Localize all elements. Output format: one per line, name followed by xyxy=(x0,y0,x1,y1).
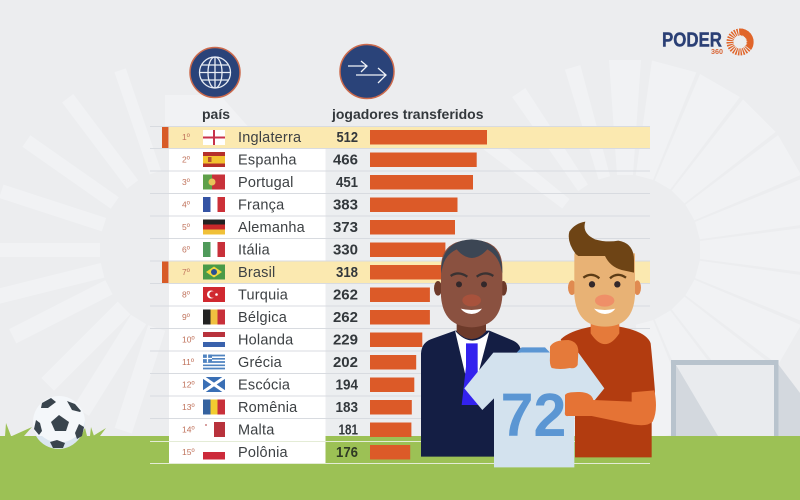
man in red shirt xyxy=(561,222,655,457)
logo: Poder360: PODER xyxy=(662,28,722,52)
row 9: Bélgica xyxy=(182,309,430,326)
row 15: Polônia: 15º xyxy=(182,447,195,457)
ranking table xyxy=(150,126,650,464)
row 8: Turquia: 8º xyxy=(182,290,190,300)
man in suit xyxy=(421,239,521,457)
row 13: Romênia: 183 xyxy=(336,399,358,416)
icon: globe xyxy=(190,48,240,98)
heading: jogadores transferidos: jogadores transferidos xyxy=(331,106,484,122)
row 10: Holanda: 10º xyxy=(182,334,195,344)
row 7: Brasil: 318 xyxy=(336,264,358,281)
row 9: Bélgica: Bélgica xyxy=(238,310,288,326)
row 3: Portugal xyxy=(182,174,473,191)
row 12: Escócia: 194 xyxy=(336,376,359,394)
row 4: França: França xyxy=(238,198,285,214)
row 7: Brasil: Brasil xyxy=(238,265,275,281)
jersey number 72 xyxy=(464,347,604,467)
row 12: Escócia xyxy=(182,376,414,394)
row 6: Itália xyxy=(182,242,445,258)
row 15: Polônia: Polônia xyxy=(238,445,289,461)
row 6: Itália: 6º xyxy=(182,244,190,254)
row 3: Portugal: Portugal xyxy=(238,175,294,191)
row 7: Brasil: 7º xyxy=(182,267,190,277)
row 6: Itália: Itália xyxy=(238,242,271,258)
row 2: Espanha: Espanha xyxy=(238,152,297,168)
row 1: Inglaterra xyxy=(182,129,487,146)
row 11: Grécia xyxy=(182,354,416,371)
icon: soccer ball with grass xyxy=(5,396,106,449)
row 14: Malta: 14º xyxy=(182,424,195,434)
row 13: Romênia xyxy=(182,399,412,416)
row 5: Alemanha: 5º xyxy=(182,222,190,232)
row 9: Bélgica: 9º xyxy=(182,312,190,322)
row 5: Alemanha: Alemanha xyxy=(238,220,306,236)
row 10: Holanda xyxy=(182,332,422,348)
row 3: Portugal: 3º xyxy=(182,177,190,187)
goal xyxy=(671,360,800,436)
row 1: Inglaterra: Inglaterra xyxy=(238,130,302,146)
row 8: Turquia xyxy=(182,286,430,304)
row 10: Holanda: 229 xyxy=(333,332,358,348)
row 6: Itália: 330 xyxy=(333,242,358,258)
row 15: Polônia xyxy=(182,444,410,461)
grass field xyxy=(0,436,800,500)
row 4: França xyxy=(182,196,458,214)
logo: Poder360: 360 xyxy=(711,49,723,56)
row 11: Grécia: Grécia xyxy=(238,355,283,371)
row 1: Inglaterra: 1º xyxy=(182,132,190,142)
row 3: Portugal: 451 xyxy=(336,174,358,191)
row 4: França: 383 xyxy=(333,196,358,214)
row 8: Turquia: Turquia xyxy=(238,288,289,304)
heading: país: país xyxy=(202,106,230,122)
row 2: Espanha: 466 xyxy=(333,152,358,168)
row 2: Espanha: 2º xyxy=(182,154,190,164)
row 5: Alemanha xyxy=(182,219,455,236)
row 15: Polônia: 176 xyxy=(336,444,358,461)
row 10: Holanda: Holanda xyxy=(238,332,294,348)
row 12: Escócia: Escócia xyxy=(238,378,291,394)
icon: transfer arrows xyxy=(340,44,394,98)
row 14: Malta xyxy=(182,422,411,438)
row 14: Malta: Malta xyxy=(238,422,275,438)
row 14: Malta: 181 xyxy=(338,422,358,438)
row 13: Romênia: 13º xyxy=(182,402,195,412)
row 9: Bélgica: 262 xyxy=(333,309,358,326)
logo: Poder360 xyxy=(662,28,754,56)
row 2: Espanha xyxy=(182,152,477,168)
row 11: Grécia: 11º xyxy=(182,357,194,367)
row 12: Escócia: 12º xyxy=(182,380,195,390)
row 8: Turquia: 262 xyxy=(333,286,358,304)
hands and arm xyxy=(550,340,656,425)
row 11: Grécia: 202 xyxy=(333,354,358,371)
row 5: Alemanha: 373 xyxy=(333,219,358,236)
jersey number 72: 72 xyxy=(501,380,566,449)
row 13: Romênia: Romênia xyxy=(238,400,298,416)
row 4: França: 4º xyxy=(182,200,190,210)
row 7: Brasil xyxy=(182,264,443,281)
row 1: Inglaterra: 512 xyxy=(336,129,358,146)
illustration: two men holding jersey xyxy=(421,222,656,467)
